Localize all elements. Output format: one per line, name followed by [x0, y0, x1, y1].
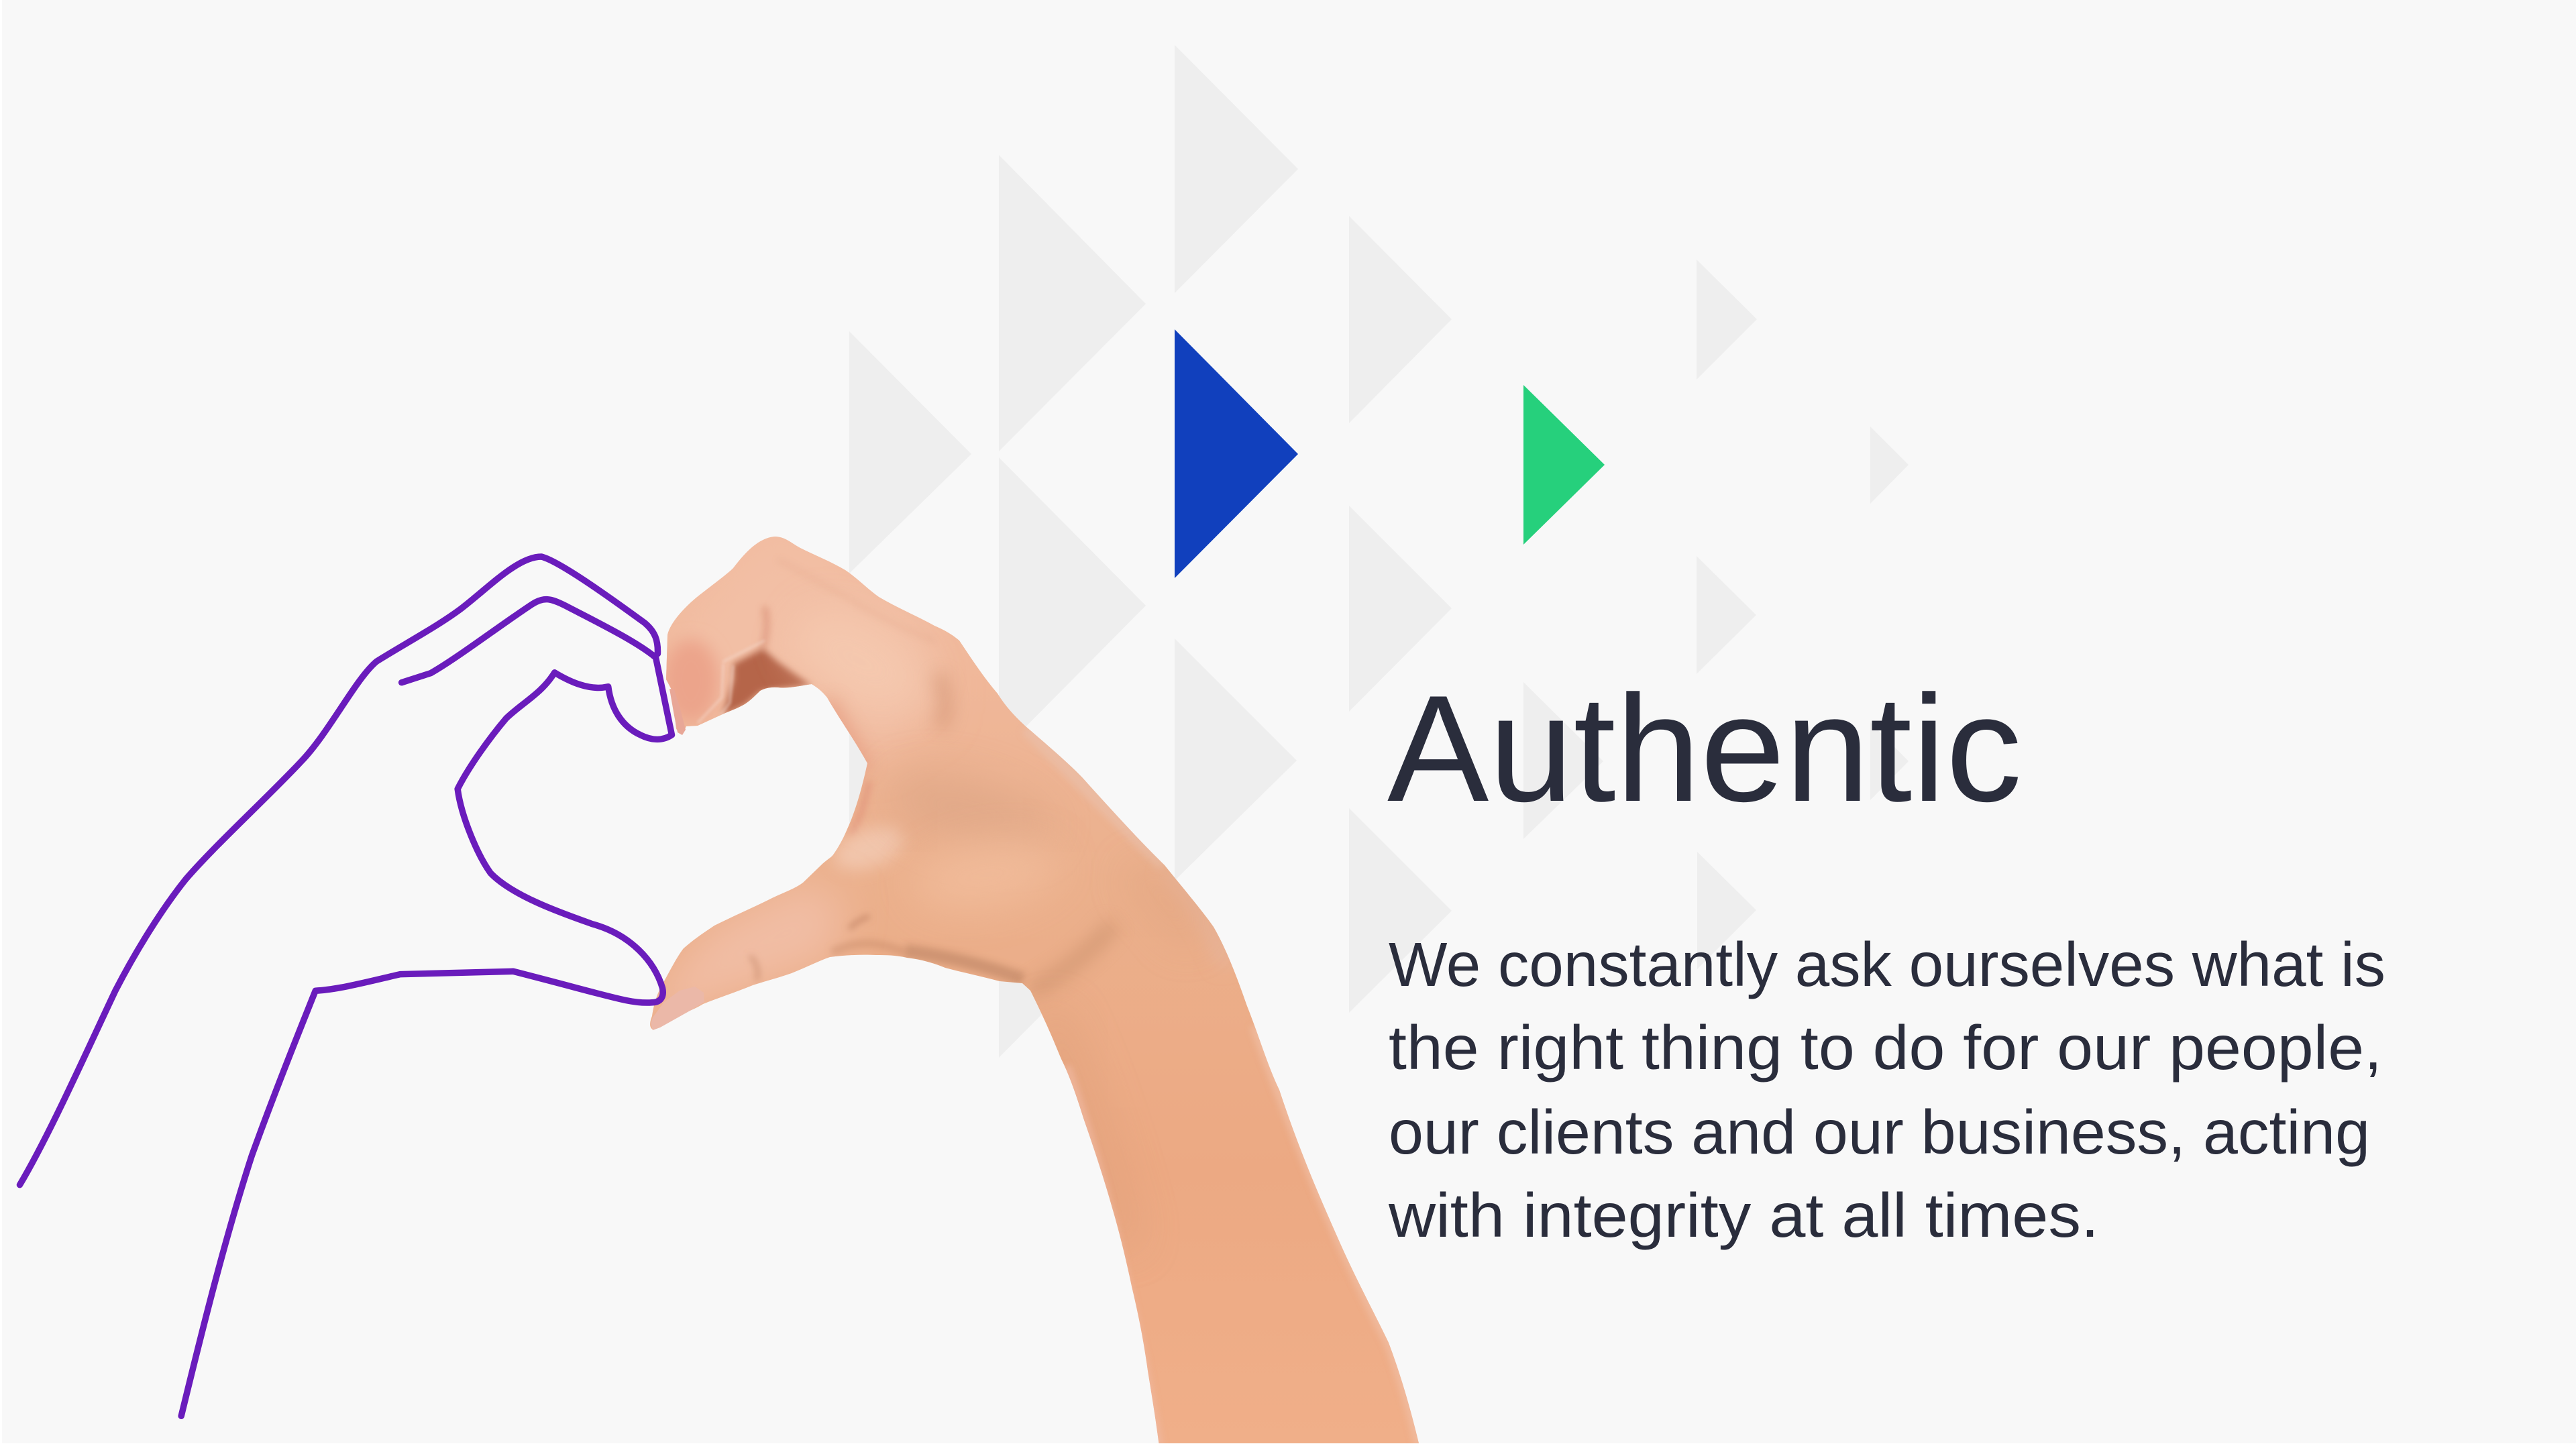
photo hand	[637, 523, 1442, 1446]
thumb tone	[653, 883, 845, 1030]
back of hand highlight	[931, 844, 1041, 904]
fingertip tone	[663, 639, 719, 722]
dark finger underside	[722, 649, 812, 716]
column 1 triangles	[849, 331, 971, 825]
back of hand shade	[911, 783, 1026, 829]
index finger nail	[669, 689, 686, 735]
finger tone	[700, 545, 923, 750]
column 6 triangles	[1697, 260, 1757, 969]
wrist lower wrinkles	[906, 951, 1023, 979]
body text: our clients and our business, acting	[1389, 1097, 2370, 1167]
hand edge band	[1026, 728, 1165, 865]
forearm edges	[1067, 1066, 1159, 1446]
knuckle crease by fingertip	[762, 607, 767, 649]
column 3 triangles	[1175, 45, 1298, 881]
title: Authentic	[1387, 663, 2022, 833]
blue triangle	[1175, 329, 1298, 578]
grey triangle pattern	[849, 45, 1909, 1058]
big knuckle shadow	[939, 674, 945, 728]
column 7 triangles	[1870, 427, 1909, 800]
purple hand outline	[19, 557, 672, 1416]
palm highlight	[832, 824, 906, 875]
column 5 triangle	[1523, 682, 1603, 839]
body text: We constantly ask ourselves what is	[1389, 930, 2385, 999]
finger fold lines	[698, 641, 765, 723]
column 2 triangles	[999, 155, 1146, 1058]
wrist upper shade	[1134, 872, 1194, 939]
outline: outer hand	[19, 557, 672, 1416]
finger back highlight	[785, 632, 898, 689]
thumb nail	[651, 987, 704, 1030]
forearm left shade	[1046, 1013, 1127, 1247]
green triangle	[1523, 385, 1605, 545]
outline: inner finger	[402, 600, 655, 683]
body text: the right thing to do for our people,	[1389, 1013, 2382, 1082]
body text: with integrity at all times.	[1388, 1180, 2099, 1250]
body text	[1388, 930, 2385, 1250]
web shading	[827, 701, 865, 771]
column 4 triangles	[1349, 216, 1452, 1013]
left edge strip	[0, 0, 2, 1446]
thumb and palm creases	[750, 916, 906, 981]
top edge crease	[778, 560, 934, 641]
bottom edge strip	[0, 1443, 2576, 1446]
wrist crease	[1030, 924, 1114, 991]
